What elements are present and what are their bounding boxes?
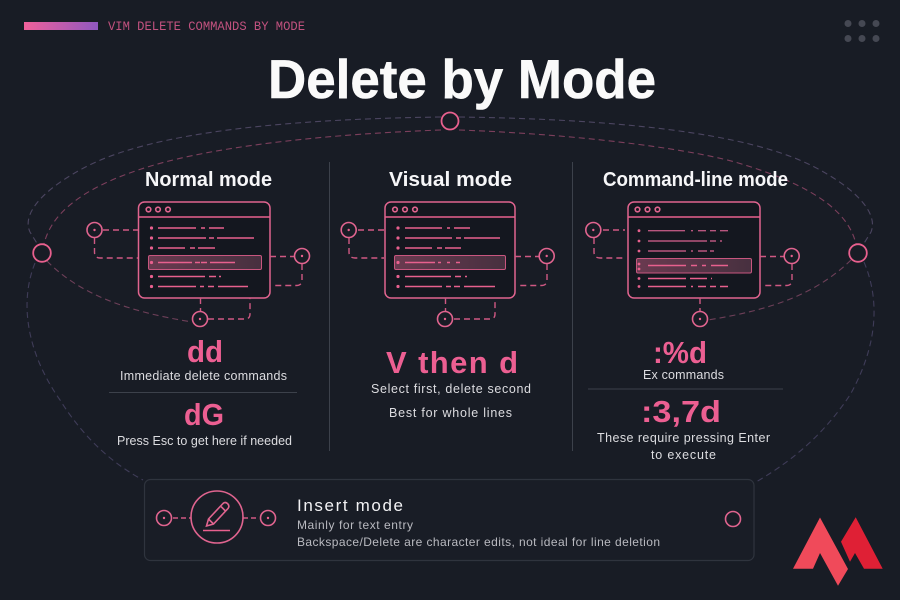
description enter: These require pressing Enter bbox=[597, 431, 770, 445]
description whole lines: Best for whole lines bbox=[389, 406, 512, 420]
description execute: to execute bbox=[651, 448, 716, 462]
node: right bbox=[294, 248, 310, 264]
description select: Select first, delete second bbox=[371, 382, 531, 396]
connectors bbox=[594, 230, 792, 311]
heading: insert mode: Insert mode bbox=[297, 496, 403, 515]
header gradient bar bbox=[24, 22, 98, 30]
node: right bbox=[260, 510, 276, 526]
node: left bbox=[341, 222, 356, 238]
node: bottom bbox=[438, 312, 452, 326]
eyebrow label: VIM DELETE COMMANDS BY MODE bbox=[108, 20, 305, 34]
icon: editor window normal bbox=[138, 202, 270, 298]
command dG: dG bbox=[184, 397, 224, 432]
column dividers bbox=[330, 162, 572, 451]
heading: normal mode: Normal mode bbox=[145, 169, 272, 191]
command dd: dd bbox=[187, 334, 223, 369]
icon: pencil bbox=[191, 491, 243, 543]
node: right bbox=[539, 248, 554, 264]
node: left bbox=[87, 222, 102, 238]
title: Delete by Mode bbox=[268, 48, 656, 110]
node: bottom bbox=[192, 312, 208, 326]
orbit node: left bbox=[33, 244, 51, 262]
text: backspace note: Backspace/Delete are character edits, not ideal for line deletion bbox=[297, 535, 660, 549]
decorative dots grid bbox=[844, 20, 880, 42]
command V then d: V then d bbox=[386, 345, 518, 380]
command %d: :%d bbox=[653, 335, 707, 370]
node: far right bbox=[726, 512, 740, 526]
orbit node: top bbox=[442, 112, 458, 130]
panel: command-line mode bbox=[586, 169, 799, 462]
heading: command-line mode: Command-line mode bbox=[603, 169, 788, 191]
description dG: Press Esc to get here if needed bbox=[117, 434, 292, 448]
heading: visual mode: Visual mode bbox=[389, 169, 512, 191]
logo bbox=[793, 517, 883, 586]
command 3,7d: :3,7d bbox=[641, 394, 721, 429]
panel: normal mode bbox=[87, 169, 310, 448]
description ex commands: Ex commands bbox=[643, 368, 724, 382]
orbit dashed curves bbox=[27, 117, 874, 482]
description dd: Immediate delete commands bbox=[120, 369, 287, 383]
node: left bbox=[586, 222, 601, 238]
node: right bbox=[784, 248, 799, 264]
connectors bbox=[349, 230, 547, 319]
panel: insert mode bbox=[144, 480, 754, 560]
connector lines bbox=[173, 517, 259, 519]
text: text entry: Mainly for text entry bbox=[297, 518, 413, 532]
connectors bbox=[94, 230, 302, 319]
panel: visual mode bbox=[341, 169, 554, 420]
node: left bbox=[156, 510, 172, 526]
icon: editor window command-line bbox=[628, 202, 760, 298]
node: bottom bbox=[692, 312, 708, 326]
orbit node: right bbox=[849, 244, 867, 262]
icon: editor window visual bbox=[385, 202, 515, 298]
